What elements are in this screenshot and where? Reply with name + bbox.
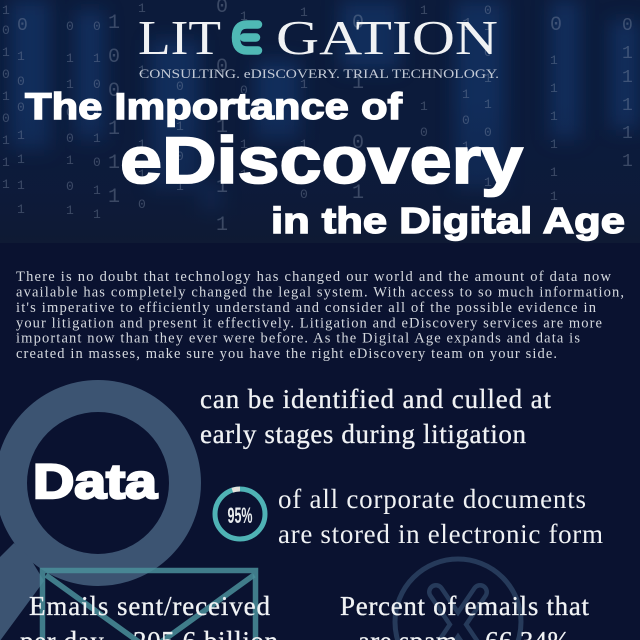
- email volume stat: Emails sent/received: [29, 591, 270, 621]
- header banner: binary code background: 1: [176, 119, 184, 134]
- header banner: binary code background: 0: [17, 100, 25, 115]
- header banner: binary code background: 1: [108, 152, 120, 175]
- header banner: binary code background: 1: [66, 153, 74, 168]
- logo wordmark left: LIT: [138, 10, 221, 65]
- header banner: binary code background: 1: [138, 137, 146, 152]
- logo wordmark right: GATION: [276, 10, 498, 65]
- header banner: binary code background: 1: [622, 124, 633, 144]
- header banner: binary code background: 0: [420, 125, 428, 140]
- header banner: binary code background: 1: [108, 186, 120, 209]
- header banner: binary code background: 1: [420, 3, 428, 18]
- header banner: binary code background: 1: [484, 97, 492, 112]
- header banner: binary code background: 0: [93, 155, 101, 170]
- header banner: binary code background: 0: [138, 197, 146, 212]
- header banner: binary code background: 1: [300, 5, 308, 20]
- intro paragraph: created in masses, make sure you have the right eDiscovery team on your side.: [16, 346, 557, 362]
- header banner: binary code background: 1: [550, 53, 558, 68]
- header banner: binary code background: 1: [550, 165, 558, 180]
- corporate documents statement: are stored in electronic form: [278, 519, 603, 549]
- header banner: binary code background: 1: [66, 203, 74, 218]
- intro paragraph: There is no doubt that technology has changed our world and the amount of data now: [16, 269, 612, 285]
- header banner: binary code background: 1: [108, 12, 120, 35]
- header banner: binary code background: 0: [17, 16, 28, 36]
- intro paragraph: available has completely changed the legal system. With access to so much information,: [16, 284, 624, 300]
- header banner: binary code background: 1: [622, 152, 633, 172]
- icon: spam X badge: [395, 559, 521, 640]
- header banner: binary code background: 0: [240, 83, 248, 98]
- header banner: binary code background: 0: [622, 16, 633, 36]
- header banner: binary code background: 1: [420, 155, 428, 170]
- header banner: binary code background: 1: [240, 137, 248, 152]
- spam percentage stat: Percent of emails that: [340, 591, 589, 621]
- logo tagline: CONSULTING. eDISCOVERY. TRIAL TECHNOLOGY.: [139, 66, 499, 81]
- header banner: binary code background: 1: [300, 77, 308, 92]
- icon: magnifying glass: [0, 396, 185, 640]
- header banner: binary code background: 0: [176, 79, 184, 94]
- header banner: binary code background: 1: [300, 137, 308, 152]
- header banner: binary code background: 1: [93, 183, 101, 198]
- magnifier label: Data: Data: [33, 456, 157, 509]
- data statement: [200, 384, 551, 449]
- header banner: binary code background: 1: [17, 128, 25, 143]
- header banner: binary code background: 1: [2, 155, 10, 170]
- header banner: binary code background: 1: [484, 175, 492, 190]
- header banner: binary code background: 0: [462, 113, 470, 128]
- header banner: binary code background: 0: [93, 77, 101, 92]
- data statement: can be identified and culled at: [200, 384, 551, 414]
- title line 2: eDiscovery: [120, 123, 523, 197]
- header banner: binary code background: 1: [550, 81, 558, 96]
- header banner: binary code background: 0: [66, 105, 74, 120]
- header banner: binary code background: 1: [66, 77, 74, 92]
- header banner: binary code background: 1: [17, 49, 25, 64]
- header banner: binary code background: 1: [17, 152, 25, 167]
- donut chart: 95%: [215, 489, 265, 539]
- title: [25, 86, 625, 241]
- header banner: binary code background: 1: [462, 139, 470, 154]
- header banner: binary code background: 0: [352, 12, 364, 35]
- header banner: binary code background: 0: [2, 111, 10, 126]
- header banner: binary code background: 1: [216, 214, 228, 237]
- header banner: binary code background: 1: [2, 89, 10, 104]
- title line 1: The Importance of: [25, 86, 403, 127]
- header banner: binary code background: 1: [93, 207, 101, 222]
- header banner: binary code background: 1: [550, 109, 558, 124]
- header banner: binary code background: 1: [550, 137, 558, 152]
- header banner: binary code background: 0: [17, 74, 25, 89]
- intro paragraph: [16, 269, 624, 362]
- logo teal E icon: [236, 24, 258, 50]
- header banner: binary code background: 0: [2, 67, 10, 82]
- donut chart: 95%: 95%: [228, 503, 252, 528]
- spam percentage stat: [340, 591, 589, 640]
- header banner: binary code background: 1: [240, 167, 248, 182]
- header banner: binary code background: 0: [108, 80, 120, 103]
- header banner: binary code background: 0: [484, 45, 492, 60]
- header banner: binary code background: 1: [484, 149, 492, 164]
- header banner: binary code background: 1: [352, 72, 364, 95]
- icon: envelope: [42, 570, 256, 640]
- email volume stat: [20, 591, 278, 640]
- header banner: binary code background: 1: [2, 3, 10, 18]
- header banner: binary code background: 1: [216, 176, 228, 199]
- header banner: binary code background: 1: [17, 202, 25, 217]
- header banner: binary code background: 1: [93, 51, 101, 66]
- data statement: early stages during litigation: [200, 419, 526, 449]
- header banner: binary code background: 1: [484, 71, 492, 86]
- header banner: binary code background: [0, 0, 640, 243]
- intro paragraph: it's imperative to efficiently understand and consider all of the possible evidence in: [16, 300, 597, 316]
- header banner: binary code background: 0: [300, 187, 308, 202]
- header banner: binary code background: 1: [216, 116, 228, 139]
- intro paragraph: important now than they ever were before. As the Digital Age expands and data is: [16, 330, 580, 346]
- header banner: binary code background: 1: [176, 179, 184, 194]
- header banner: binary code background: 1: [138, 63, 146, 78]
- header banner: binary code background: 1: [622, 44, 633, 64]
- corporate documents statement: [278, 484, 603, 549]
- header banner: binary code background: 0: [550, 14, 562, 37]
- header banner: binary code background: 0: [176, 149, 184, 164]
- header banner: binary code background: 0: [484, 3, 492, 18]
- header banner: binary code background: 1: [108, 118, 120, 141]
- corporate documents statement: of all corporate documents: [278, 484, 586, 514]
- logo: [138, 10, 499, 81]
- header banner: binary code background: 0: [484, 125, 492, 140]
- header banner: binary code background: 1: [2, 133, 10, 148]
- header banner: binary code background: 1: [138, 167, 146, 182]
- intro paragraph: your litigation and present it effectively. Litigation and eDiscovery services are more: [16, 316, 602, 332]
- header banner: binary code background: 1: [622, 96, 633, 116]
- header banner: binary code background: 1: [66, 51, 74, 66]
- header banner: binary code background: 1: [2, 177, 10, 192]
- header banner: binary code background: 1: [240, 9, 248, 24]
- header banner: binary code background: 0: [66, 19, 74, 34]
- header banner: binary code background: 1: [93, 105, 101, 120]
- header banner: binary code background: 1: [93, 131, 101, 146]
- header banner: binary code background: 0: [93, 19, 101, 34]
- header banner: binary code background: 1: [17, 178, 25, 193]
- header banner: binary code background: 1: [550, 189, 558, 204]
- header banner: binary code background: 1: [2, 45, 10, 60]
- header banner: binary code background: 0: [66, 131, 74, 146]
- header banner: binary code background: 0: [108, 46, 120, 69]
- header banner: binary code background: 1: [484, 19, 492, 34]
- header banner: binary code background: 1: [352, 182, 364, 205]
- header banner: binary code background: 0: [352, 132, 364, 155]
- header banner: binary code background: 1: [138, 1, 146, 16]
- header banner: binary code background: 1: [462, 16, 473, 36]
- header banner: binary code background: 0: [2, 23, 10, 38]
- title line 3: in the Digital Age: [271, 200, 625, 241]
- header banner: binary code background: 0: [66, 179, 74, 194]
- header banner: binary code background: 1: [420, 99, 428, 114]
- header banner: binary code background: 0: [216, 56, 228, 79]
- header banner: binary code background: 1: [622, 68, 633, 88]
- header banner: binary code background: 1: [462, 87, 470, 102]
